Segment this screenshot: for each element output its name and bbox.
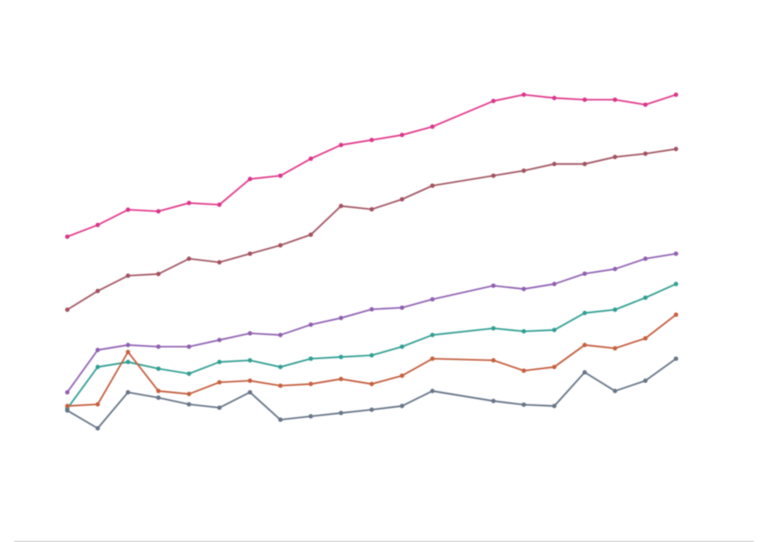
series: mauve line — [67, 149, 676, 310]
series: slate gray line — [67, 359, 676, 428]
series: orange line — [67, 315, 676, 406]
series: pink line — [67, 95, 676, 237]
series: teal line — [67, 284, 676, 408]
series: purple line — [67, 254, 676, 392]
